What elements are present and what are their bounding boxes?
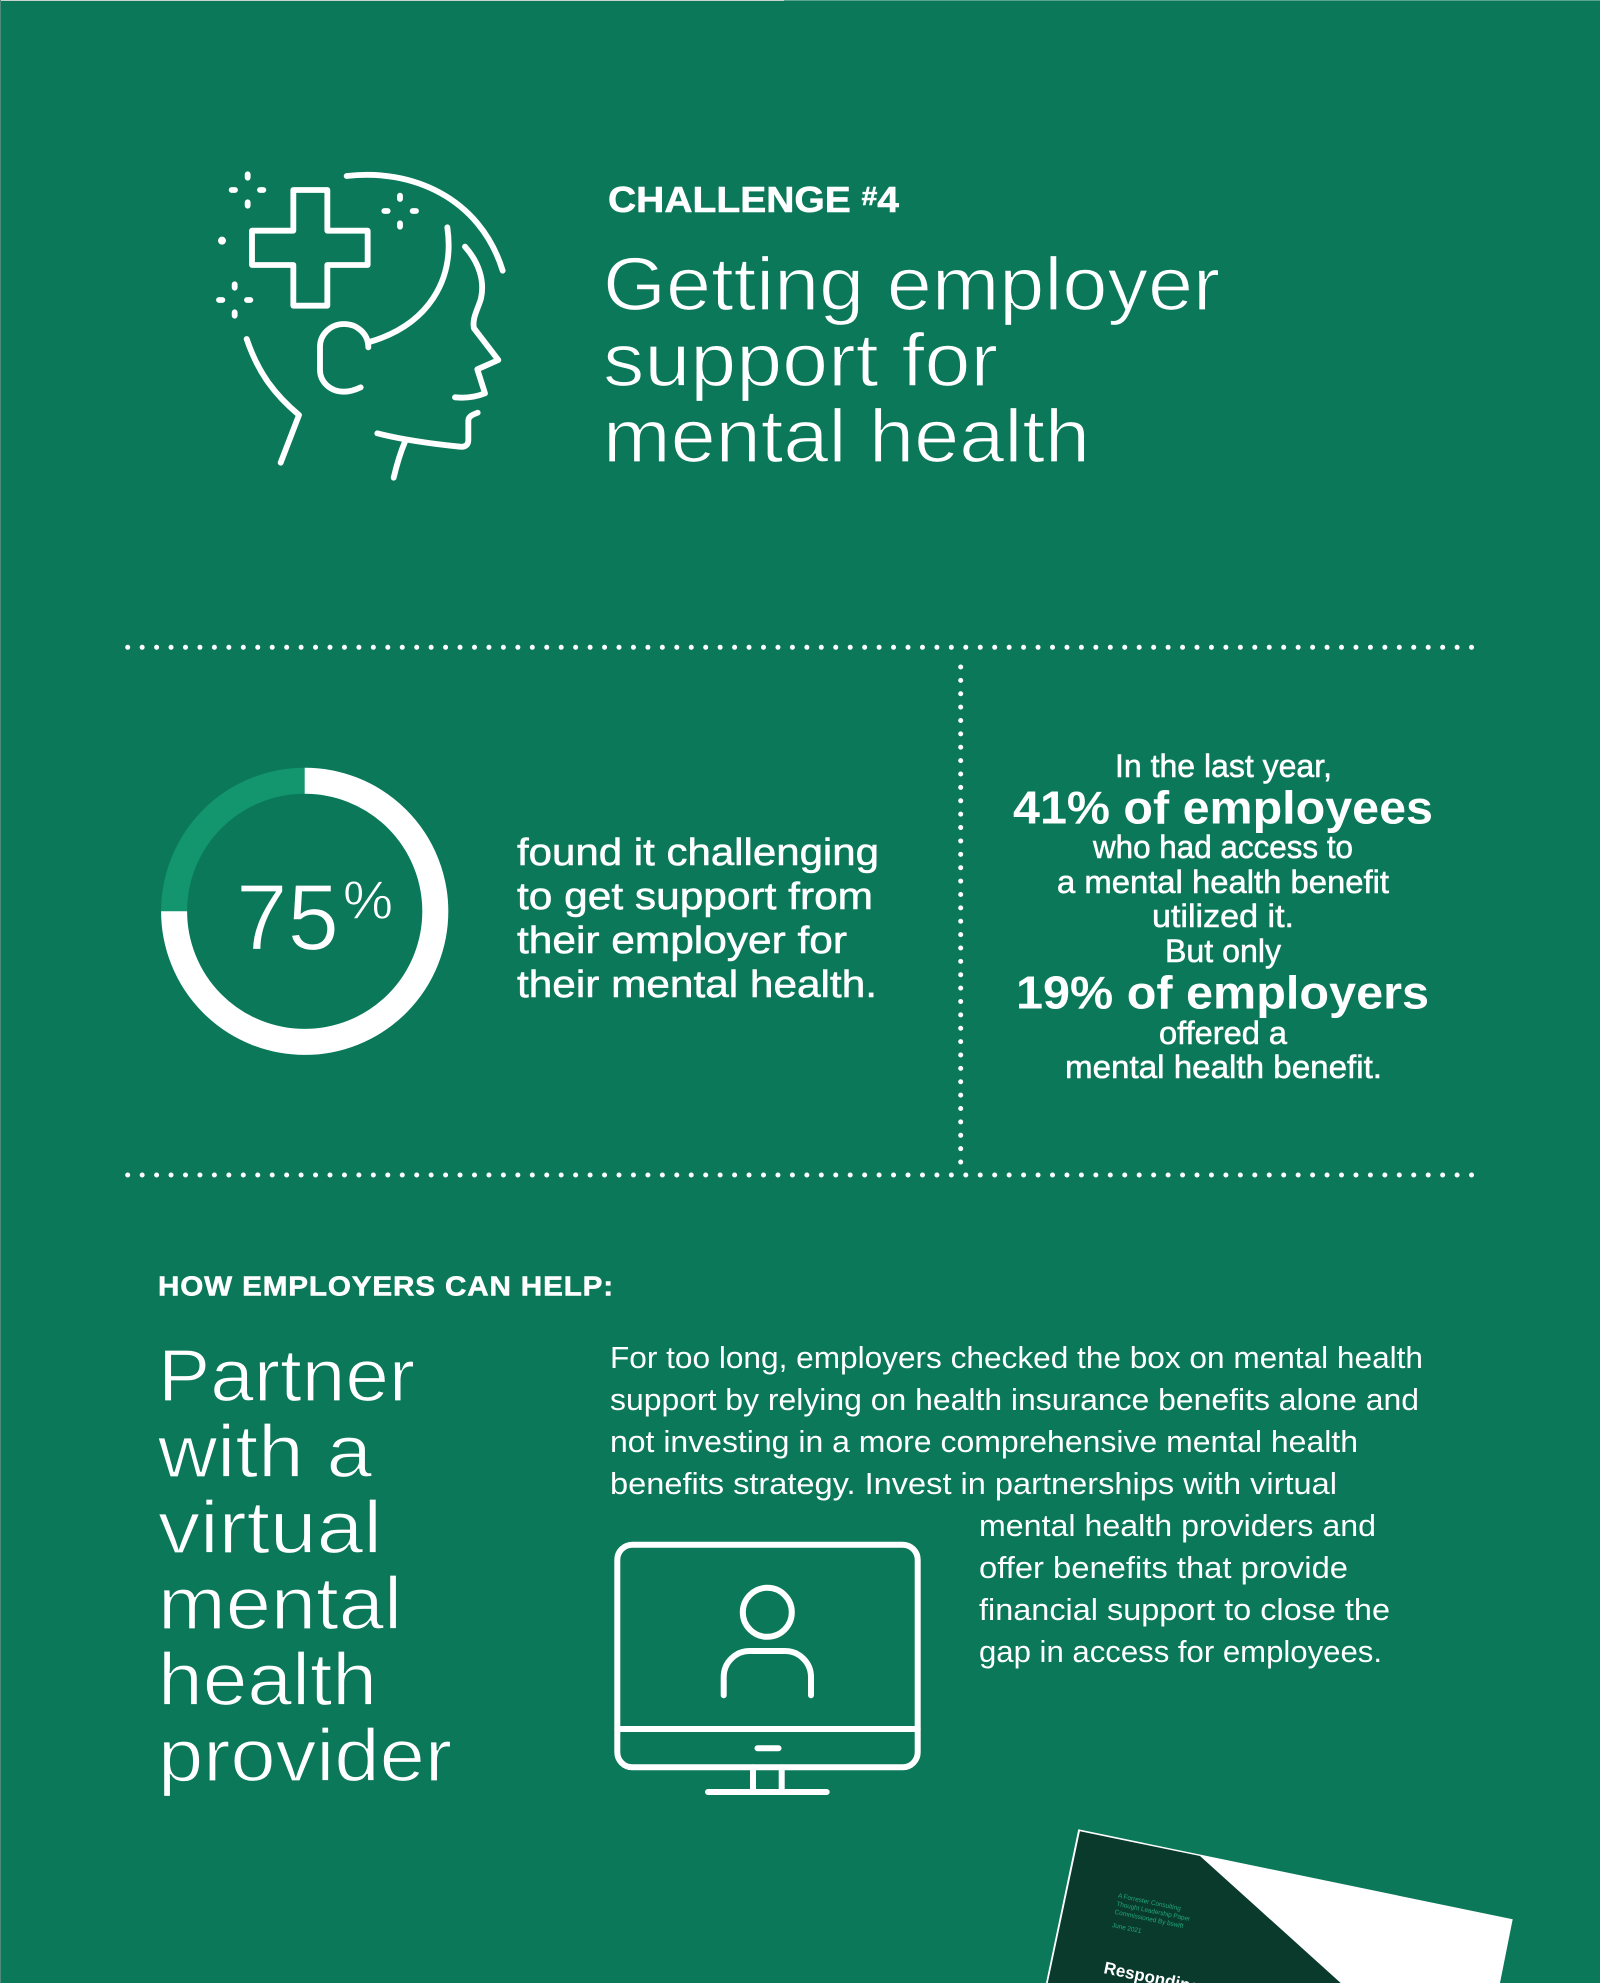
stat description: 75 percent: their mental health.	[517, 964, 877, 1006]
heading: partner with a virtual mental health provider	[157, 1334, 452, 1797]
stat: 41% of employees: 41% of employees	[1013, 782, 1433, 834]
chart: 75% donut	[174, 781, 435, 1042]
heading: partner with a virtual mental health provider: mental	[158, 1562, 402, 1645]
stat: 75 percent	[236, 864, 393, 970]
eyebrow: challenge number: 4	[877, 179, 899, 220]
icon: monitor with person	[617, 1545, 918, 1792]
text block: benefit statistics: offered a	[1159, 1015, 1287, 1051]
body text: benefits strategy. Invest in partnerships with virtual	[610, 1466, 1337, 1501]
stat: 75 percent: 75	[236, 864, 339, 970]
heading: partner with a virtual mental health provider: virtual	[158, 1486, 382, 1569]
text block: benefit statistics	[1013, 748, 1433, 1085]
stat: 75 percent: %	[343, 870, 393, 930]
body text: mental health providers and	[979, 1508, 1376, 1543]
body text	[610, 1340, 1423, 1669]
title: mental health	[603, 394, 1090, 478]
heading: partner with a virtual mental health provider: with a	[157, 1410, 373, 1493]
report cover small text: Thought Leadership Paper	[1116, 1901, 1191, 1923]
text block: benefit statistics: utilized it.	[1152, 898, 1294, 934]
report cover small text: A Forrester Consulting	[1117, 1893, 1182, 1913]
heading: partner with a virtual mental health provider: provider	[158, 1714, 452, 1797]
heading: partner with a virtual mental health provider: Partner	[158, 1334, 415, 1417]
stat description: 75 percent	[517, 832, 879, 1006]
title: Getting employer	[603, 242, 1220, 326]
stat: 19% of employers: 19% of employers	[1016, 966, 1429, 1018]
body text: offer benefits that provide	[979, 1550, 1348, 1585]
text block: benefit statistics: a mental health benefit	[1057, 864, 1389, 900]
dotted divider bottom	[128, 1172, 1481, 1178]
title	[603, 242, 1220, 478]
body text: support by relying on health insurance benefits alone and	[610, 1382, 1419, 1417]
text block: benefit statistics: But only	[1165, 933, 1281, 969]
body text: not investing in a more comprehensive mental health	[610, 1424, 1358, 1459]
dotted divider vertical	[958, 667, 963, 1168]
report cover small text: June 2021	[1111, 1922, 1142, 1935]
report cover small text: Commissioned By bswift	[1114, 1909, 1184, 1930]
icon: head with medical cross	[218, 174, 503, 478]
text block: benefit statistics: In the last year,	[1115, 748, 1332, 784]
section label: HOW EMPLOYERS CAN HELP:	[158, 1270, 614, 1302]
report cover	[1040, 1829, 1513, 1983]
text block: benefit statistics: mental health benefit.	[1065, 1049, 1382, 1085]
heading: partner with a virtual mental health provider: health	[158, 1638, 377, 1721]
body text: financial support to close the	[979, 1592, 1390, 1627]
stat description: 75 percent: to get support from	[517, 876, 873, 918]
eyebrow: challenge number: CHALLENGE	[608, 179, 832, 220]
stat description: 75 percent: their employer for	[517, 920, 847, 962]
body text: For too long, employers checked the box on mental health	[610, 1340, 1423, 1375]
text block: benefit statistics: who had access to	[1092, 829, 1353, 865]
report cover small text	[1111, 1893, 1191, 1935]
stat description: 75 percent: found it challenging	[517, 832, 879, 874]
dotted divider top	[128, 645, 1481, 650]
title: support for	[603, 318, 998, 402]
body text: gap in access for employees.	[979, 1634, 1382, 1669]
eyebrow: challenge number: #	[862, 181, 878, 211]
